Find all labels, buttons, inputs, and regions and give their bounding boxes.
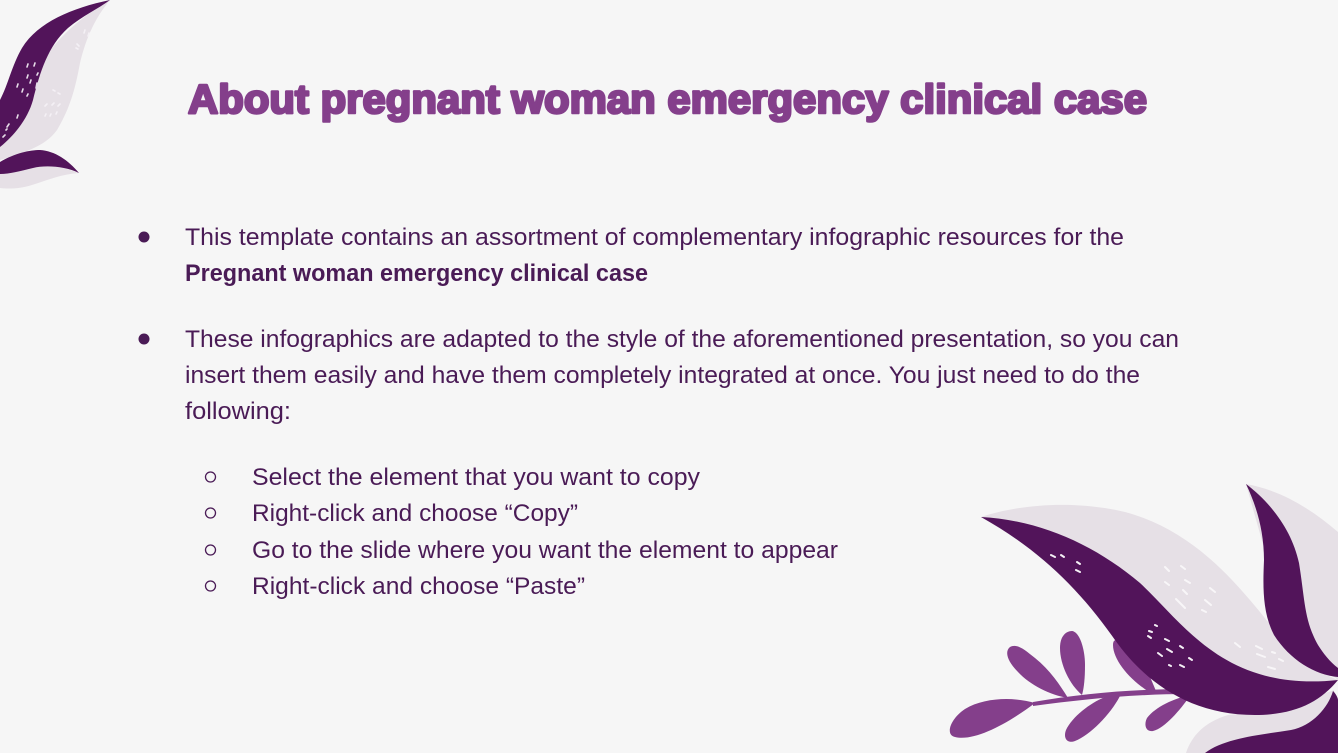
bullet list: explanation: following: [185,398,291,425]
decoration: bottom-right leaves and branch [950,484,1338,753]
bullet list: intro: This template contains an assortment of complementary infographic resources for the [185,224,1124,251]
sub-list: steps: Go to the slide where you want the element to appear [252,537,838,564]
sub-list: steps [206,464,838,600]
decoration: top-left leaves [0,0,110,189]
branch with small leaves [950,631,1190,742]
title: About pregnant woman emergency clinical case [188,76,1147,122]
sub-list: steps: Right-click and choose “Copy” [252,500,578,527]
bullet list: intro: Pregnant woman emergency clinical case [185,260,648,287]
sub-list: steps: Right-click and choose “Paste” [252,573,585,600]
bullet list: explanation [138,326,1179,425]
bullet list: explanation: insert them easily and have them completely integrated at once. You just need to do the [185,362,1140,389]
bullet list: intro [138,224,1124,287]
sub-list: steps: Select the element that you want to copy [252,464,700,491]
bullet list: explanation: These infographics are adapted to the style of the aforementioned presentation, so you can [185,326,1179,353]
